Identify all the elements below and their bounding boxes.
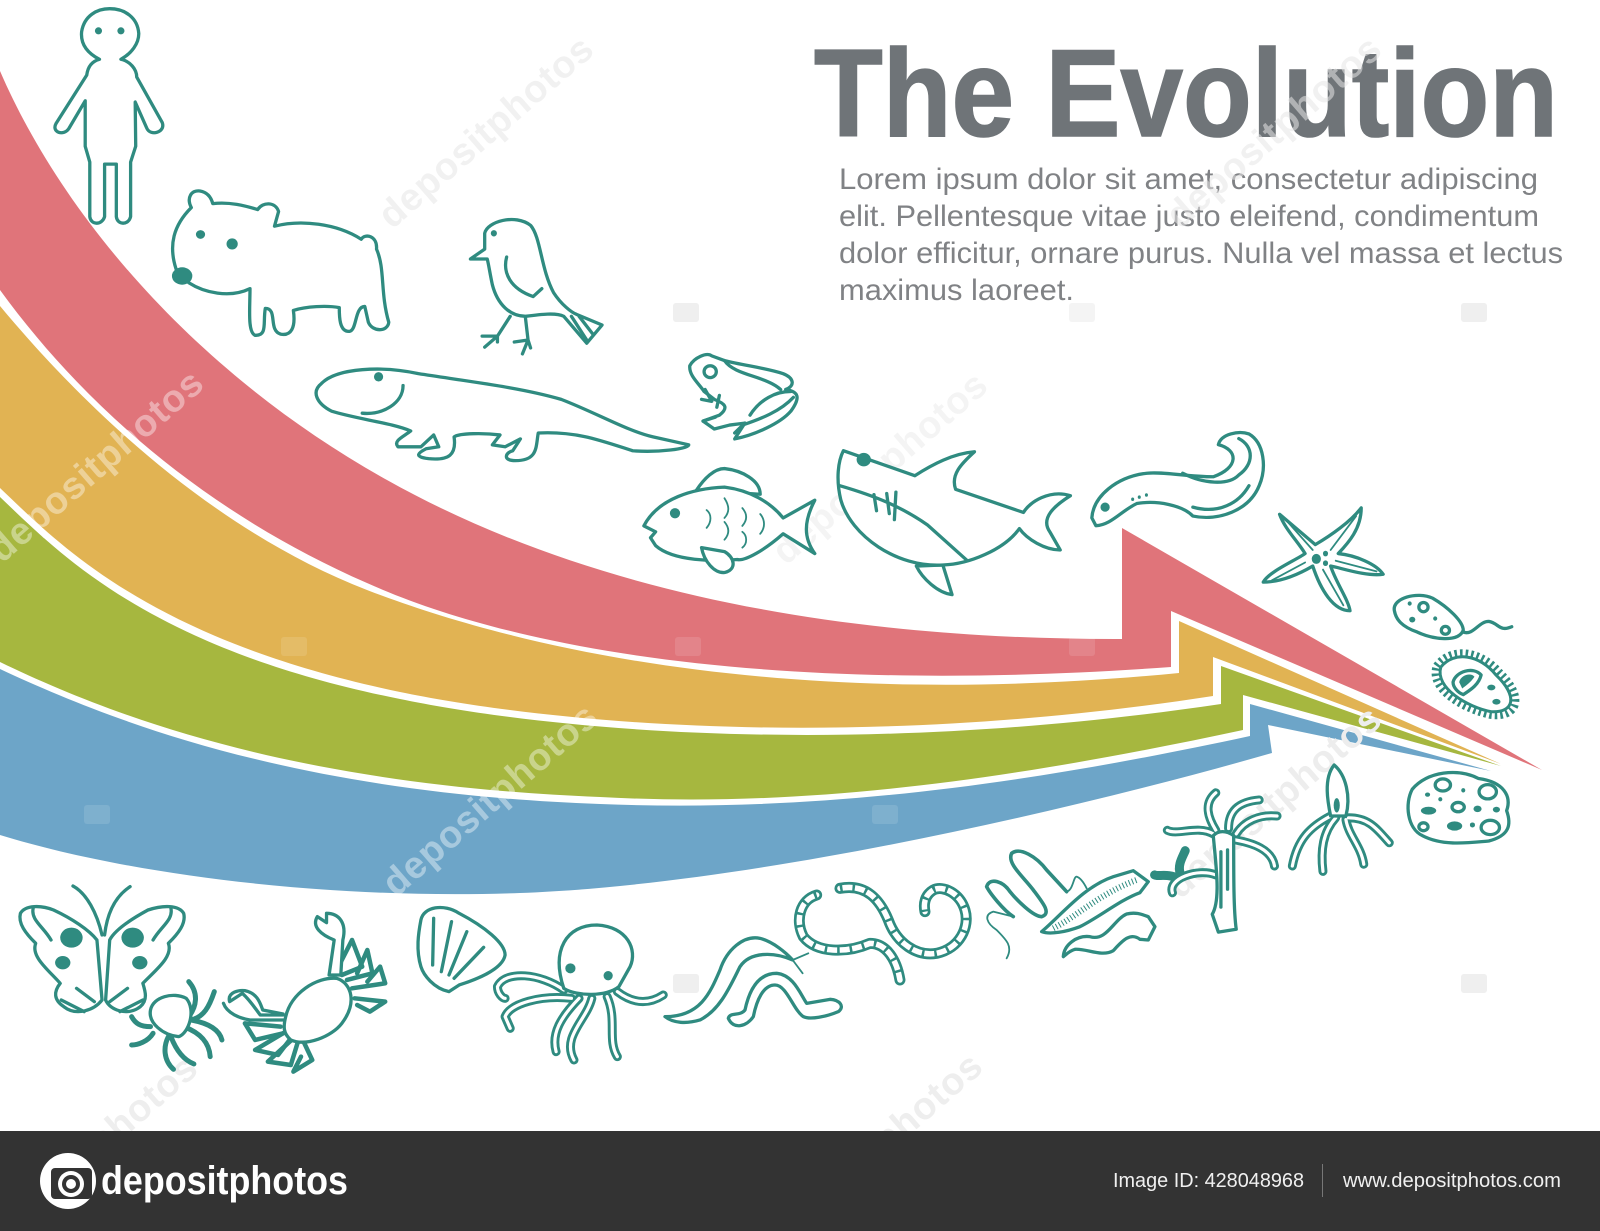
icon: salamander xyxy=(316,369,689,461)
band: green xyxy=(0,497,1501,799)
footer: website: www.depositphotos.com xyxy=(1342,1170,1561,1192)
lower worms, drawn in zoom-8 coordinates xyxy=(665,851,1155,1026)
icon: paramecium xyxy=(1436,653,1515,715)
icon: polyp xyxy=(1292,765,1389,871)
paragraph text block: maximus laoreet. xyxy=(839,274,1074,307)
icon: starfish xyxy=(1263,508,1383,611)
band: yellow xyxy=(0,306,1501,764)
icon: crab xyxy=(223,913,385,1072)
icon: eel xyxy=(1092,433,1263,526)
icon: shark xyxy=(838,451,1070,595)
footer: image id: Image ID: 428048968 xyxy=(1113,1170,1304,1192)
icon: hydra xyxy=(1155,793,1277,932)
rainbow evolution arrow xyxy=(0,71,1542,894)
icon: frog xyxy=(690,355,797,439)
icon: spider xyxy=(132,982,222,1069)
watermarks: depositphotos xyxy=(374,696,606,905)
band: blue xyxy=(0,669,1491,894)
lower animals, drawn in zoom-3 coordinates xyxy=(20,886,663,1072)
logo: wordmark: depositphotos xyxy=(101,1159,348,1203)
band: red xyxy=(0,71,1542,770)
paragraph text block: elit. Pellentesque vitae justo eleifend, condimentum xyxy=(839,200,1539,233)
paragraph text block: Lorem ipsum dolor sit amet, consectetur adipiscing xyxy=(839,163,1538,196)
icon: segmented worm xyxy=(799,887,966,980)
icon: octopus xyxy=(497,925,663,1060)
watermarks: depositphotos xyxy=(1158,698,1390,907)
icon: bacterium xyxy=(1394,595,1512,639)
icon: shell xyxy=(418,908,505,992)
icon: fish xyxy=(644,469,815,573)
icon: roundworm xyxy=(728,973,841,1026)
icon: bird xyxy=(470,220,602,354)
icon: flatworm xyxy=(1063,913,1155,957)
logo: camera badge xyxy=(40,1153,96,1209)
watermarks: depositphotos xyxy=(370,28,602,237)
right animals, drawn in zoom-2 coordinates xyxy=(838,433,1515,932)
paragraph text block: dolor efficitur, ornare purus. Nulla vel massa et lectus xyxy=(839,237,1563,270)
paragraph text block xyxy=(839,163,1563,307)
icon: bear xyxy=(172,191,389,335)
icon: amoeba xyxy=(1408,772,1509,843)
footer bar xyxy=(0,1131,1600,1231)
upper animals, drawn in zoom-1 coordinates xyxy=(55,9,815,573)
watermarks: depositphotos xyxy=(764,364,996,573)
icon: butterfly xyxy=(20,886,184,1012)
icon: leech xyxy=(1042,871,1148,933)
icon: threadworm xyxy=(665,938,808,1022)
watermark over title: depositphotos xyxy=(1158,28,1390,237)
icon: human xyxy=(55,9,163,223)
icon: hairpin worm xyxy=(987,851,1087,958)
